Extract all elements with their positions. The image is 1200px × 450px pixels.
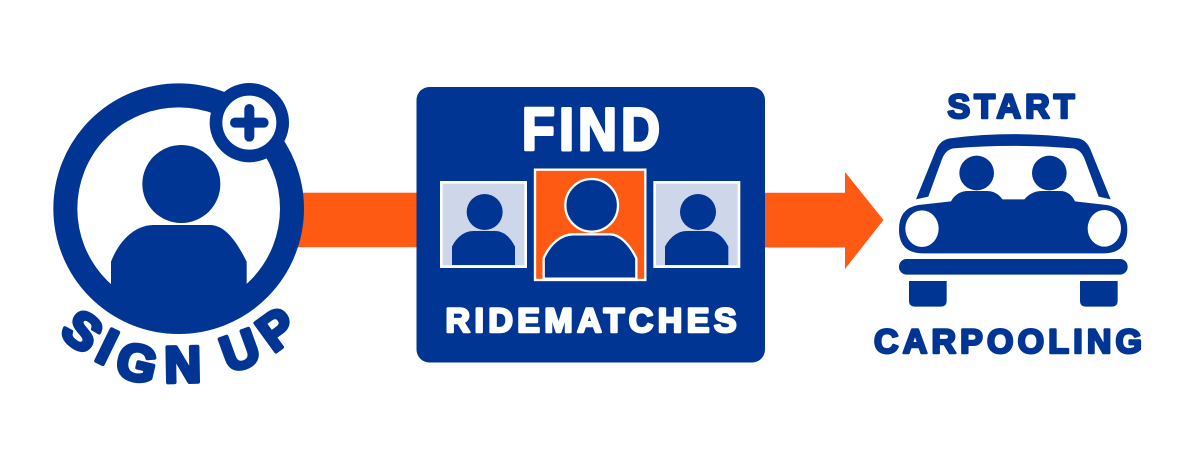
icon: user profile with plus badge [65,89,292,322]
profile cards [441,170,739,280]
profile ring [65,95,292,322]
windshield frame [916,134,1111,199]
step 1: sign up [51,89,307,395]
car body with passengers [899,191,1127,253]
panel background [416,87,765,362]
step 2: find ridematches panel [416,87,765,362]
heading: curved sign up letters [51,296,307,395]
heading: curved sign up letters: I [88,318,126,375]
plus badge [216,89,283,156]
heading: curved sign up letters: N [164,336,202,393]
icon: car with two people [899,134,1128,307]
headlights [905,210,1121,247]
heading: curved sign up letters: S [51,298,113,364]
heading: find: FIND [522,96,664,164]
wheels [909,281,1118,307]
card: left match [441,182,526,267]
label: ridematches: RIDEMATCHES [446,302,736,340]
arrow: find to start carpooling [760,172,884,269]
arrow: sign up to find [296,193,421,247]
heading: curved sign up letters: G [111,331,163,395]
passenger heads [959,156,1067,190]
label: carpooling: CARPOOLING [874,323,1142,361]
step 3: start carpooling [874,88,1142,361]
heading: curved sign up letters: U [213,317,267,384]
user body [111,225,247,310]
plus sign [235,109,264,137]
heading: curved sign up letters: P [246,296,307,362]
bumper [899,259,1128,275]
user head [142,145,220,223]
heading: start: START [948,88,1075,126]
card: highlighted match [535,170,645,280]
card: right match [655,182,739,267]
